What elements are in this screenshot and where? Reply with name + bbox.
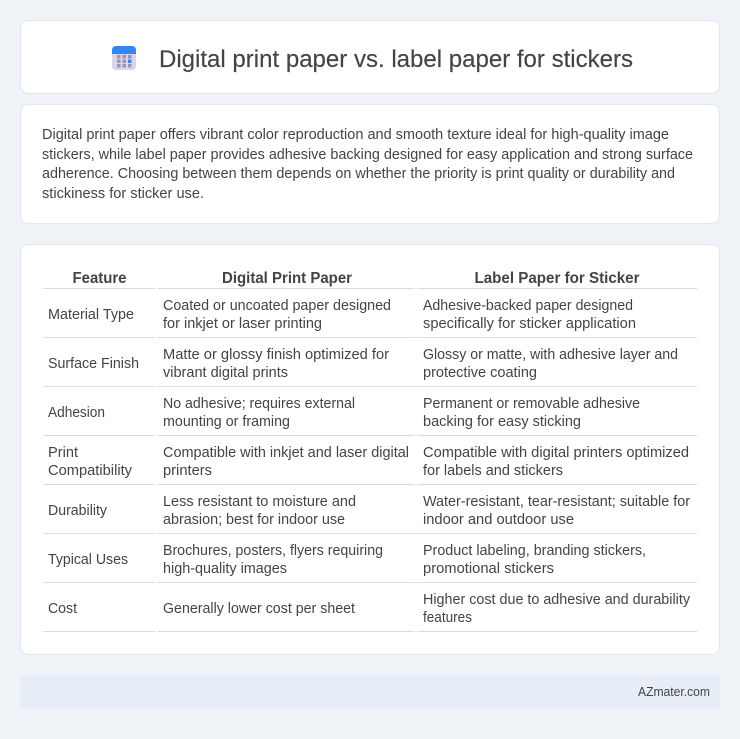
icon: calendar [112,46,136,70]
row: adhesion: backing for easy sticking [423,414,581,430]
row: typical uses [48,543,646,577]
row: surface finish: protective coating [423,365,537,381]
row: cost: Higher cost due to adhesive and durability [423,592,691,608]
row: durability: indoor and outdoor use [423,512,574,528]
row: material type: Material Type [48,307,134,323]
row: print compatibility [48,445,689,479]
title: Digital print paper vs. label paper for stickers [159,46,633,73]
row: typical uses: Brochures, posters, flyers requiring [163,543,383,559]
row: surface finish: vibrant digital prints [163,365,288,381]
row: print compatibility: printers [163,463,212,479]
row: print compatibility: Print [48,445,78,461]
row: surface finish: Surface Finish [48,356,139,372]
table header: Digital Print Paper [222,270,352,287]
row: material type: Adhesive-backed paper designed [423,298,633,314]
text block: introduction: stickers, while label paper provides adhesive backing designed for easy application and strong surface [42,147,693,163]
row: adhesion: No adhesive; requires external [163,396,355,412]
row: surface finish: Glossy or matte, with adhesive layer and [423,347,678,363]
row: material type: Coated or uncoated paper designed [163,298,391,314]
table header: Feature [72,270,127,287]
row: material type [48,298,636,332]
text block: introduction: Digital print paper offers vibrant color reproduction and smooth texture ideal for high-quality image [42,127,669,143]
row: surface finish: Matte or glossy finish optimized for [163,347,389,363]
row: surface finish [48,347,678,381]
row: print compatibility: Compatible with digital printers optimized [423,445,689,461]
row: print compatibility: for labels and stickers [423,463,563,479]
row: durability [48,494,690,528]
row: adhesion: Permanent or removable adhesive [423,396,640,412]
row: durability: Durability [48,503,108,519]
row: material type: specifically for sticker application [423,316,636,332]
row: cost [48,592,691,626]
row: typical uses: high-quality images [163,561,287,577]
row: cost: Cost [48,601,77,617]
row: cost: features [423,610,472,626]
row: adhesion: Adhesion [48,405,105,421]
text block: introduction: adherence. Choosing between them depends on whether the priority is print quality or durability and [42,166,675,182]
row: cost: Generally lower cost per sheet [163,601,355,617]
row: durability: Water-resistant, tear-resistant; suitable for [423,494,690,510]
footer: AZmater.com [638,685,710,699]
row: durability: Less resistant to moisture and [163,494,356,510]
panel: title card [20,20,720,94]
panel: introduction [20,104,720,224]
row: adhesion [48,396,640,430]
row: typical uses: promotional stickers [423,561,554,577]
row: typical uses: Typical Uses [48,552,128,568]
row: material type: for inkjet or laser printing [163,316,322,332]
row: adhesion: mounting or framing [163,414,290,430]
table header [72,270,640,287]
text block: introduction [42,127,693,202]
table header: Label Paper for Sticker [474,270,640,287]
row: typical uses: Product labeling, branding stickers, [423,543,646,559]
text block: introduction: stickiness for sticker use. [42,186,204,202]
panel: comparison table [20,244,720,654]
row: print compatibility: Compatible with inkjet and laser digital [163,445,409,461]
row: print compatibility: Compatibility [48,463,133,479]
footer [20,675,720,709]
row: durability: abrasion; best for indoor use [163,512,345,528]
